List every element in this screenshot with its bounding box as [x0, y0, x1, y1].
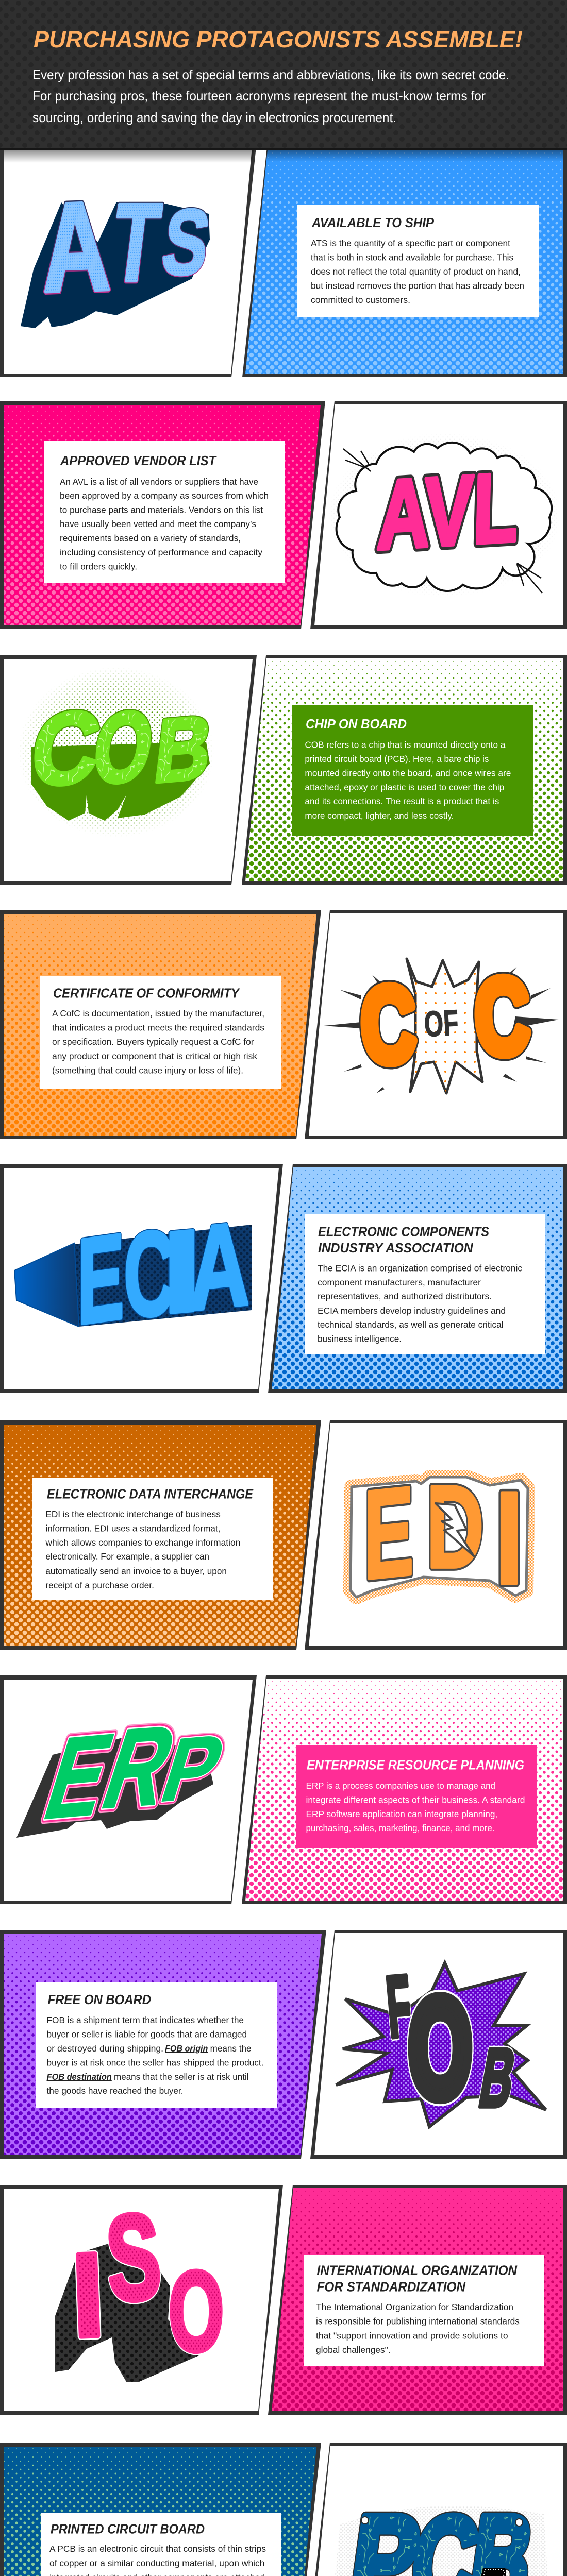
body text: The ECIA is an organization comprised of electronic [318, 1263, 522, 1274]
body text: (something that could cause injury or loss of life). [52, 1065, 243, 1076]
icon: cloud burst [337, 443, 552, 593]
icon: ECIA lettering: I [162, 1205, 202, 1338]
body text: ATS is the quantity of a specific part or component [311, 238, 510, 248]
text box [297, 205, 539, 317]
body text [318, 1263, 522, 1344]
panel: ATS artwork [0, 147, 256, 377]
body text: requirements based on a variety of standards, [60, 533, 241, 543]
body text: or destroyed during shipping. [46, 2043, 163, 2054]
intro text: sourcing, ordering and saving the day in electronics procurement. [32, 110, 396, 125]
icon: ECIA lettering [77, 1197, 249, 1350]
intro text [32, 67, 509, 125]
icon: FOB lettering: B [474, 2032, 522, 2124]
icon: EDI lettering: E [364, 1460, 414, 1606]
icon: ISO lettering: S [102, 2189, 165, 2327]
icon: CofC lettering: C [359, 964, 418, 1085]
icon: ATS lettering: T [106, 181, 166, 304]
icon: ERP lettering: R [89, 1702, 190, 1833]
icon: ERP lettering: P [151, 1715, 235, 1821]
body text: FOB destination [46, 2072, 112, 2082]
icon: ATS lettering: S [157, 191, 215, 294]
panel: FOB definition [0, 1930, 326, 2159]
icon: COB lettering: C [27, 688, 105, 809]
body text [52, 1008, 264, 1076]
body text: information. EDI uses a standardized format, [45, 1523, 220, 1533]
icon: badge [351, 1477, 528, 1597]
icon: star burst [336, 1963, 546, 2127]
panel: CofC definition [0, 910, 321, 1139]
icon: ERP lettering: R [89, 1702, 190, 1833]
icon: ISO extrusion [55, 2244, 199, 2382]
body text: representatives, and authorized distributors. [318, 1291, 492, 1301]
panel: EDI definition [0, 1420, 321, 1650]
icon: ERP lettering: E [31, 1708, 126, 1844]
text box [296, 1745, 537, 1848]
body text [45, 1509, 240, 1590]
icon: ISO lettering: O [169, 2248, 224, 2375]
body text: that is both in stock and available for purchase. This [311, 252, 513, 263]
body text: means that the seller is at risk until [114, 2072, 249, 2082]
body text: A CofC is documentation, issued by the manufacturer, [52, 1008, 264, 1019]
icon: EDI lettering: I [495, 1465, 524, 1612]
icon: ECIA extrusion [14, 1225, 252, 1327]
heading: INTERNATIONAL ORGANIZATION [316, 2263, 518, 2278]
icon: ERP lettering: E [31, 1708, 126, 1844]
body text: A PCB is an electronic circuit that consists of thin strips [49, 2544, 266, 2554]
body text: any product or component that is critical or high risk [52, 1051, 257, 1061]
body text: and its connections. The result is a product that is [305, 796, 499, 806]
icon: ATS lettering: S [157, 191, 215, 294]
body text: mounted directly onto the board, and once wires are [305, 768, 511, 778]
body text: to purchase parts and materials. Vendors on this list [60, 505, 263, 515]
panel: PCB artwork [305, 2443, 567, 2576]
text box [305, 1214, 545, 1354]
body text: to fill orders quickly. [60, 562, 137, 572]
icon: CofC lettering: C [359, 964, 418, 1085]
body text: component manufacturers, manufacturer [318, 1277, 481, 1287]
icon: halftone halo [330, 2506, 549, 2576]
icon: ISO lettering [70, 2189, 224, 2375]
body text: means the [210, 2043, 252, 2054]
intro text: For purchasing pros, these fourteen acronyms represent the must-know terms for [32, 88, 486, 104]
body text: technical standards, as well as generate critical [318, 1319, 503, 1330]
icon: ERP lettering: E [31, 1708, 126, 1844]
text box [32, 1478, 273, 1600]
icon: FOB lettering: O [409, 1970, 472, 2125]
body text: more compact, lighter, and less costly. [305, 810, 454, 821]
heading [316, 2263, 518, 2294]
icon: ERP lettering: P [151, 1715, 235, 1821]
icon: ATS extrusion [21, 202, 210, 328]
icon: AVL lettering: AVL [376, 452, 519, 570]
icon: ECIA lettering: E [77, 1208, 124, 1350]
text box [41, 2513, 281, 2576]
panel: ECIA definition [268, 1164, 567, 1393]
icon: ISO lettering: O [169, 2248, 224, 2375]
body text: buyer is at risk once the seller has shipped the product. [46, 2058, 263, 2068]
panel: EDI artwork [305, 1420, 567, 1650]
icon: COB lettering: O [89, 689, 158, 806]
body text: is responsible for publishing international standards [316, 2316, 520, 2327]
panel: ISO artwork [0, 2185, 283, 2415]
body text: receipt of a purchase order. [45, 1580, 154, 1590]
panel: COB artwork [0, 655, 257, 885]
icon: CofC lettering: OF [423, 1003, 459, 1044]
body text [311, 238, 524, 305]
body text: An AVL is a list of all vendors or suppliers that have [60, 477, 258, 487]
body text [60, 477, 269, 572]
icon: CofC lettering: C [473, 956, 531, 1077]
icon: COB lettering: B [149, 697, 217, 802]
icon: COB lettering: B [149, 697, 217, 802]
icon: FOB lettering: F [383, 1957, 415, 2056]
body text: business intelligence. [318, 1333, 402, 1344]
body text: of copper or a similar conducting material, upon which [49, 2558, 265, 2568]
icon: FOB lettering [383, 1957, 522, 2125]
icon: ISO lettering: I [70, 2228, 106, 2362]
body text [305, 740, 511, 821]
heading: ELECTRONIC DATA INTERCHANGE [47, 1486, 254, 1501]
icon: AVL lettering: AVL [376, 452, 519, 570]
text box [36, 1982, 277, 2108]
icon: COB lettering [27, 688, 217, 809]
body text: electronically. For example, a supplier can [45, 1551, 209, 1562]
heading [318, 1224, 490, 1256]
icon: ATS lettering: S [157, 191, 215, 294]
body text [316, 2302, 520, 2355]
intro text: Every profession has a set of special terms and abbreviations, like its own secret code. [32, 67, 509, 82]
body text: but instead removes the portion that has already been [311, 280, 524, 291]
body text: global challenges". [316, 2345, 391, 2355]
icon: ISO lettering: I [70, 2228, 106, 2362]
body text: attached, epoxy or plastic is used to cover the chip [305, 782, 504, 792]
icon: burst [324, 959, 559, 1093]
panel: PCB definition [0, 2443, 321, 2576]
icon: COB lettering: C [27, 688, 105, 809]
body text: does not reflect the total quantity of product on hand, [311, 266, 521, 277]
heading: ENTERPRISE RESOURCE PLANNING [307, 1757, 524, 1773]
icon: ISO lettering: O [169, 2248, 224, 2375]
body text: ECIA members develop industry guidelines and [318, 1306, 506, 1316]
body text: printed circuit board (PCB). Here, a bare chip is [305, 754, 489, 764]
heading: ELECTRONIC COMPONENTS [318, 1224, 490, 1240]
icon: ATS lettering: T [106, 181, 166, 304]
panel: FOB artwork [310, 1930, 567, 2159]
body text: ERP software application can integrate planning, [306, 1809, 497, 1819]
body text: ERP is a process companies use to manage and [306, 1781, 495, 1791]
body text: been approved by a company as sources from which [60, 490, 269, 501]
icon: ATS lettering: A [39, 175, 112, 318]
icon: ISO lettering: S [102, 2189, 165, 2327]
icon: ECIA lettering: E [77, 1208, 124, 1350]
text box [304, 2255, 544, 2366]
icon: ECIA lettering: I [162, 1205, 202, 1338]
body text: that indicates a product meets the required standards [52, 1022, 264, 1032]
icon: lightning bolt [436, 1503, 474, 1556]
heading: CHIP ON BOARD [306, 716, 407, 732]
body text: committed to customers. [311, 295, 410, 305]
icon: ATS lettering: A [39, 175, 112, 318]
heading: CERTIFICATE OF CONFORMITY [53, 985, 240, 1001]
icon: ERP lettering: R [89, 1702, 190, 1833]
icon: ISO lettering: S [102, 2189, 165, 2327]
text box [44, 441, 285, 583]
icon: EDI lettering: E [364, 1460, 414, 1606]
text box [292, 705, 533, 836]
body text: which allows companies to exchange information [45, 1537, 240, 1548]
icon: FOB lettering: F [383, 1957, 415, 2056]
icon: PCB lettering [343, 2490, 540, 2576]
icon: COB lettering: C [27, 688, 105, 809]
body text: COB refers to a chip that is mounted directly onto a [305, 740, 506, 750]
panel: ECIA artwork [0, 1164, 283, 1393]
panel: AVL definition [0, 401, 325, 629]
body text: the goods have reached the buyer. [46, 2086, 184, 2096]
icon: CofC lettering: C [473, 956, 531, 1077]
icon: EDI lettering: D [426, 1462, 484, 1592]
panel: ERP definition [242, 1675, 567, 1904]
body text: FOB origin [165, 2043, 208, 2054]
icon: ECIA lettering: A [189, 1197, 249, 1336]
body text: or specification. Buyers typically request a CofC for [52, 1037, 254, 1047]
body text: The International Organization for Standardization [316, 2302, 513, 2312]
icon: CofC lettering [359, 956, 531, 1085]
icon: ATS lettering [39, 175, 215, 318]
heading: APPROVED VENDOR LIST [60, 453, 217, 468]
body text: integrate different aspects of their business. A standard [306, 1795, 525, 1805]
body text: that "support innovation and provide solutions to [316, 2331, 508, 2341]
icon: ATS lettering: A [39, 175, 112, 318]
panel: COB definition [242, 655, 567, 885]
icon: halftone halo [18, 667, 214, 837]
body text [306, 1781, 525, 1833]
panel: CofC artwork [305, 910, 567, 1139]
icon: FOB lettering: O [409, 1970, 472, 2125]
icon: halftone halo [328, 433, 560, 598]
icon: ATS lettering: T [106, 181, 166, 304]
panel: ISO definition [268, 2185, 567, 2415]
body text: FOB is a shipment term that indicates whether the [46, 2015, 244, 2025]
icon: FOB lettering: B [474, 2032, 522, 2124]
icon: ECIA lettering: A [189, 1197, 249, 1336]
icon: ECIA lettering: C [124, 1206, 175, 1342]
icon: EDI lettering: I [495, 1465, 524, 1612]
icon: ERP lettering [31, 1702, 235, 1844]
icon: COB lettering: O [89, 689, 158, 806]
body text: including consistency of performance and capacity [60, 547, 262, 557]
heading: INDUSTRY ASSOCIATION [318, 1240, 474, 1256]
panel: ERP artwork [0, 1675, 257, 1904]
heading: AVAILABLE TO SHIP [311, 215, 435, 230]
icon: board holes and chip [346, 2517, 523, 2576]
icon: ERP lettering: P [151, 1715, 235, 1821]
icon: EDI lettering: D [426, 1462, 484, 1592]
heading: FOR STANDARDIZATION [316, 2279, 466, 2294]
icon: ERP lettering: R [89, 1702, 190, 1833]
icon: COB extrusion [31, 742, 210, 821]
body text: have usually been vetted and meet the company’s [60, 519, 256, 529]
text box [40, 976, 281, 1089]
icon: EDI lettering [364, 1460, 524, 1612]
icon: COB lettering: O [89, 689, 158, 806]
body text [46, 2015, 263, 2096]
icon: ECIA lettering: C [124, 1206, 175, 1342]
panel: ATS definition [242, 147, 567, 377]
icon: ISO lettering: I [70, 2228, 106, 2362]
header band [0, 0, 567, 150]
panel: AVL artwork [310, 401, 567, 629]
heading: FREE ON BOARD [48, 1992, 151, 2007]
body text: buyer or seller is liable for goods that are damaged [46, 2029, 247, 2040]
heading: PRINTED CIRCUIT BOARD [51, 2521, 205, 2536]
title: PURCHASING PROTAGONISTS ASSEMBLE! [34, 26, 523, 53]
icon: COB lettering: B [149, 697, 217, 802]
body text: EDI is the electronic interchange of business [45, 1509, 221, 1519]
body text [49, 2544, 268, 2576]
icon: ERP lettering: P [151, 1715, 235, 1821]
body text: purchasing, sales, marketing, finance, and more. [306, 1823, 495, 1833]
icon: ERP lettering: E [31, 1708, 126, 1844]
icon: ERP extrusion [16, 1736, 213, 1838]
body text: automatically send an invoice to a buyer, upon [45, 1566, 227, 1577]
